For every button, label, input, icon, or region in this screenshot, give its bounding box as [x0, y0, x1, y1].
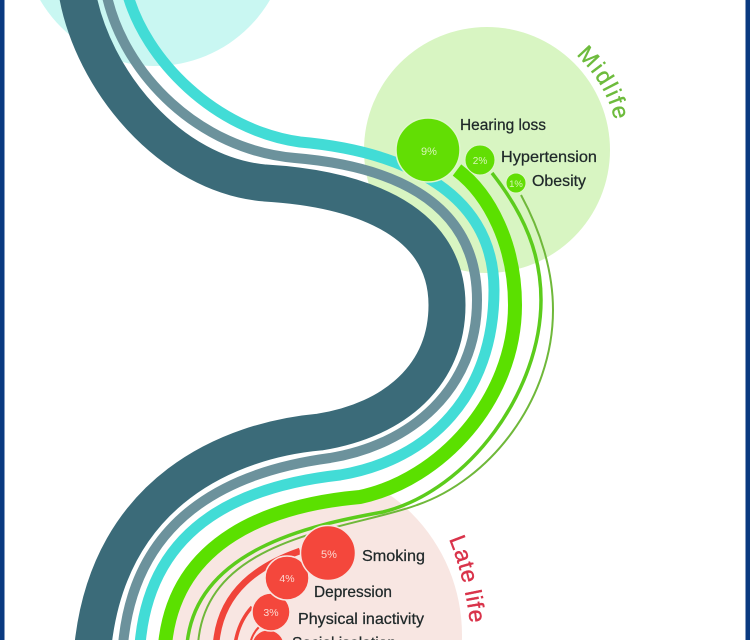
band: grey pathway: [106, 0, 477, 640]
band: cyan early-life pathway: [127, 0, 494, 640]
bubble: obesity 1%: 1%: [509, 179, 523, 190]
bubble: smoking 5%: 5%: [321, 549, 337, 561]
bubble: hypertension 2%: [465, 145, 495, 175]
frame: left border: [0, 0, 4, 640]
bubble: social isolation 4%: [252, 630, 284, 640]
band: overall dark pathway: [77, 0, 447, 640]
group: midlife risk factors: [396, 44, 626, 194]
bubble: physical inactivity 3%: 3%: [263, 607, 279, 619]
background circle: midlife: [364, 27, 610, 273]
label: obesity: Obesity: [532, 173, 586, 190]
group: late-life risk factors: [251, 524, 485, 640]
band: red depression pathway: [235, 607, 252, 640]
band: thick green hearing loss pathway: [165, 170, 515, 640]
background circle: early life: [22, 0, 288, 66]
background circle: late life: [172, 495, 462, 640]
label: physical inactivity: Physical inactivity: [298, 611, 424, 628]
label: depression: Depression: [314, 584, 392, 601]
bubble: hearing loss 9%: 9%: [421, 146, 437, 158]
label: hypertension: Hypertension: [501, 149, 597, 166]
bubble: hypertension 2%: 2%: [473, 156, 487, 167]
heading: Midlife: [577, 44, 626, 118]
label: hearing loss: Hearing loss: [460, 117, 546, 134]
band: red physical inactivity pathway: [250, 627, 259, 640]
bubble: smoking 5%: [300, 526, 356, 580]
band: thin green hypertension pathway: [187, 173, 541, 640]
bubble: depression 4%: 4%: [279, 573, 295, 585]
heading: Late life: Late life: [450, 534, 485, 622]
inner mask: white area inside the curve: [250, 183, 447, 432]
bubble: hearing loss 9%: [396, 118, 460, 182]
heading: Midlife: Midlife: [577, 44, 626, 118]
label: smoking: Smoking: [362, 548, 425, 565]
band: thick red smoking pathway: [216, 551, 300, 640]
band: thinnest green obesity pathway: [198, 195, 553, 640]
frame: right border: [746, 0, 750, 640]
bubble: obesity 1%: [506, 173, 526, 193]
bubble: physical inactivity 3%: [252, 593, 290, 631]
bubble: depression 4%: [265, 556, 309, 600]
